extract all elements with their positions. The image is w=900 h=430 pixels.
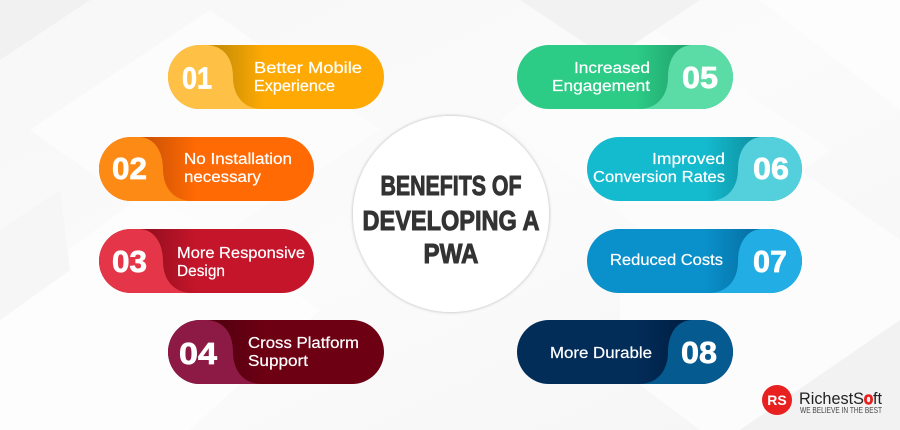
- pill 05: Increased Engagement: Engagement: [552, 78, 651, 95]
- pill 04: Cross Platform Support: Support: [248, 353, 309, 370]
- pill 06: Improved Conversion Rates: 06: [753, 152, 789, 186]
- pill 05: Increased Engagement: [517, 45, 733, 109]
- pill 04: Cross Platform Support: 04: [179, 337, 217, 371]
- pill 02: No Installation necessary: No Installation: [184, 151, 292, 168]
- pill 02: No Installation necessary: [99, 137, 314, 201]
- pill 08: More Durable: More Durable: [550, 345, 652, 362]
- pill 05: Increased Engagement: 05: [682, 61, 718, 95]
- logo: RichestSoft: RS: [767, 392, 787, 408]
- pill 08: More Durable: 08: [681, 336, 717, 370]
- pill 03: More Responsive Design: Design: [177, 263, 225, 280]
- center circle with title: [353, 116, 549, 312]
- pill 07: Reduced Costs: [587, 229, 802, 293]
- pill 01: Better Mobile Experience: Better Mobile: [254, 60, 362, 77]
- pill 07: Reduced Costs: 07: [753, 245, 787, 279]
- logo: RichestSoft: RichestSoft: [799, 389, 882, 408]
- pill 04: Cross Platform Support: Cross Platform: [248, 335, 359, 352]
- title: BENEFITS OF: [380, 170, 522, 201]
- pill 04: Cross Platform Support: [168, 320, 384, 384]
- pill 06: Improved Conversion Rates: Conversion Rates: [593, 169, 725, 186]
- pill 02: No Installation necessary: 02: [112, 152, 147, 186]
- pill 03: More Responsive Design: [99, 229, 314, 293]
- title: PWA: [424, 238, 478, 269]
- pill 03: More Responsive Design: 03: [112, 245, 147, 279]
- title: [362, 170, 540, 269]
- title: DEVELOPING A: [362, 205, 540, 236]
- pill 06: Improved Conversion Rates: [587, 137, 802, 201]
- logo: RichestSoft: [762, 385, 882, 415]
- pill 08: More Durable: [517, 320, 733, 384]
- pill 01: Better Mobile Experience: 01: [182, 62, 212, 96]
- pill 01: Better Mobile Experience: [168, 45, 384, 109]
- pill 05: Increased Engagement: Increased: [574, 60, 650, 77]
- pill 06: Improved Conversion Rates: Improved: [652, 151, 725, 168]
- pill 02: No Installation necessary: necessary: [184, 169, 261, 186]
- pill 07: Reduced Costs: Reduced Costs: [610, 252, 723, 269]
- pill 01: Better Mobile Experience: Experience: [254, 78, 335, 95]
- pill 03: More Responsive Design: More Responsive: [177, 245, 305, 262]
